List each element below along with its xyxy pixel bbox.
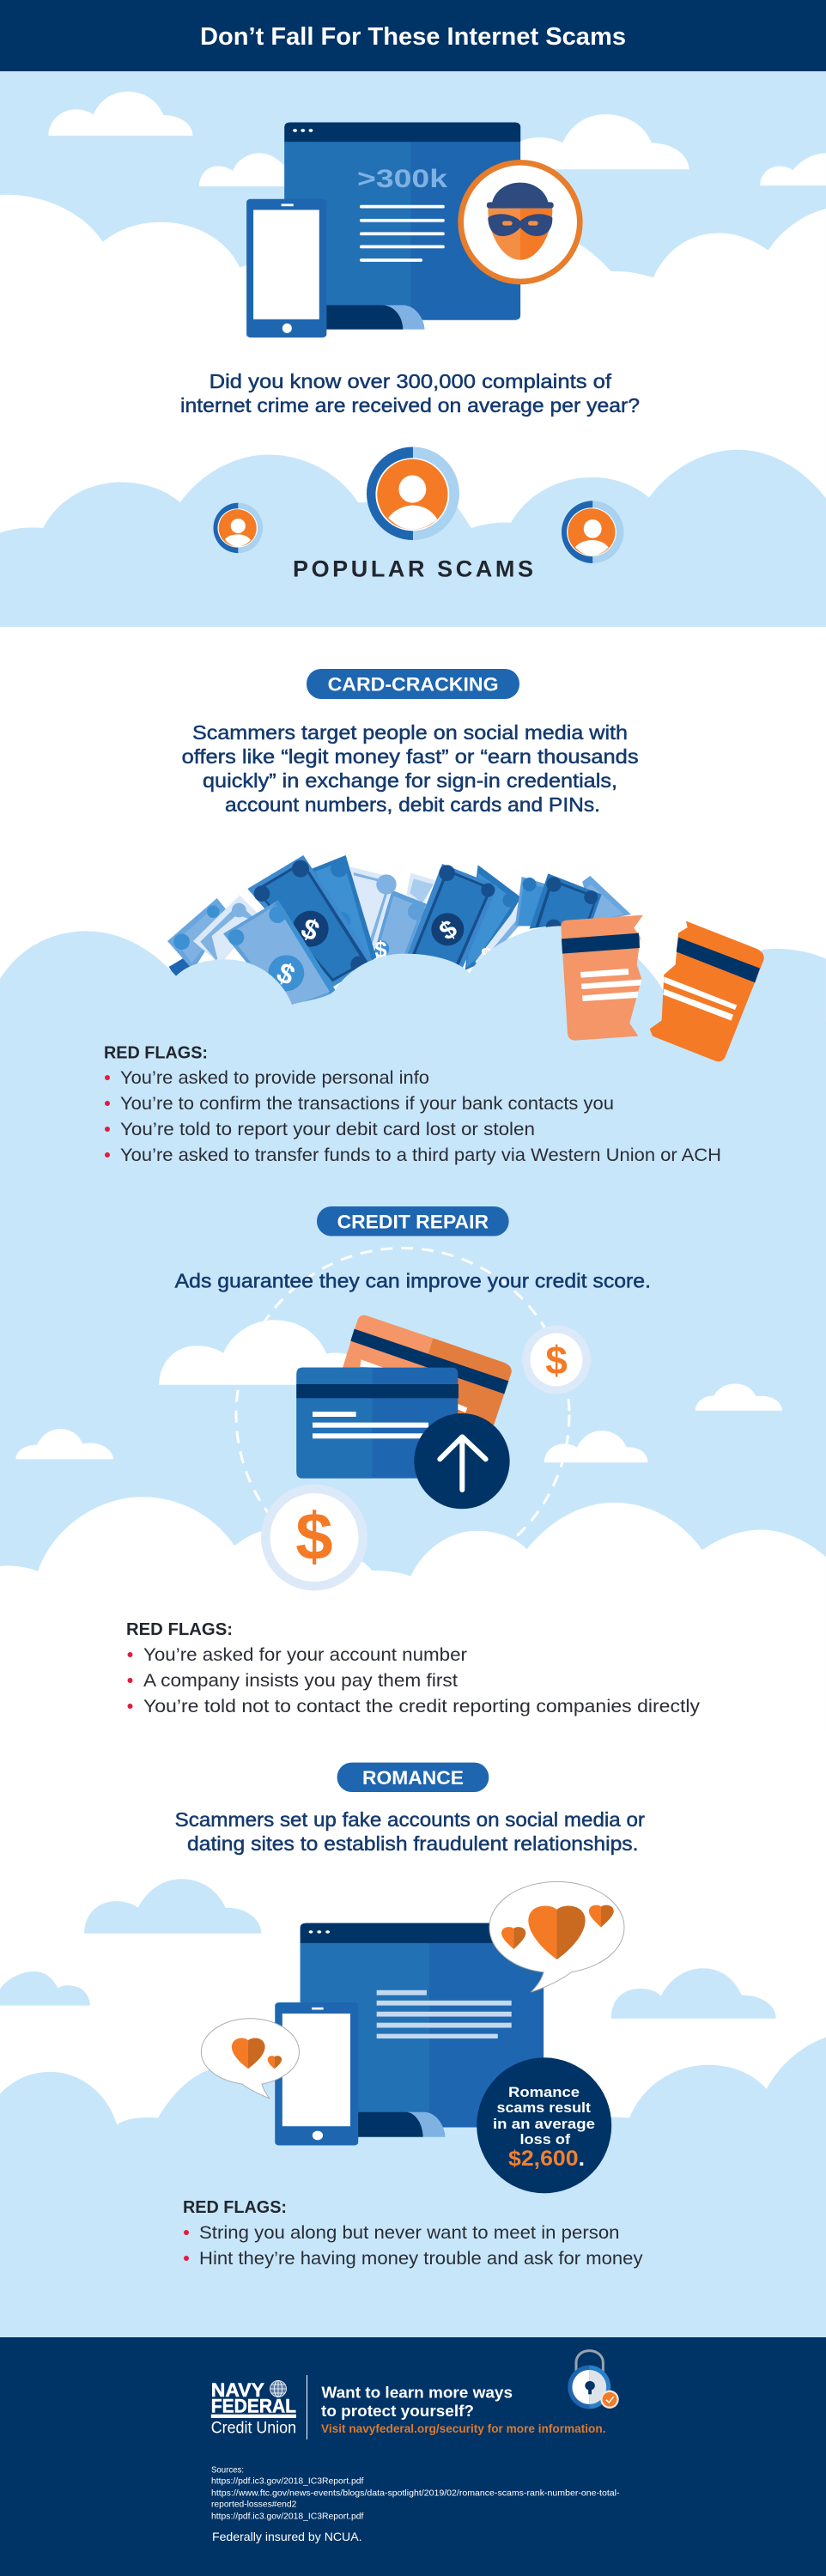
pill: card-cracking (307, 669, 519, 699)
red flags: credit repair: You’re asked for your account number (143, 1645, 467, 1665)
pill: credit repair: CREDIT REPAIR (337, 1211, 489, 1232)
red flags: credit repair: RED FLAGS: (126, 1619, 233, 1639)
description: card-cracking: quickly” in exchange for sign-in credentials, (203, 769, 617, 792)
icon: large coin: $ (295, 1498, 333, 1574)
red flags: romance: RED FLAGS: (183, 2197, 287, 2217)
red flags: card-cracking (104, 1042, 721, 1165)
callout: average loss: $2,600. (508, 2147, 585, 2171)
icon: padlock (568, 2351, 619, 2409)
logo: Navy Federal Credit Union (211, 2379, 296, 2437)
illustration: cash fan: $ (434, 914, 463, 946)
title bar (0, 0, 826, 71)
description: romance (175, 1808, 645, 1855)
panel: card-cracking (0, 627, 826, 1203)
description: card-cracking: Scammers target people on social media with (192, 721, 628, 744)
call to action: Want to learn more ways (321, 2385, 513, 2402)
intro question (180, 370, 640, 416)
illustration: cash fan (167, 855, 631, 1011)
illustration: cash fan: $ (374, 937, 387, 963)
red flags: romance: Hint they’re having money trouble and ask for money (199, 2249, 643, 2269)
pill: card-cracking: CARD-CRACKING (328, 673, 499, 695)
red flags: credit repair: A company insists you pay them first (143, 1671, 458, 1691)
callout: average loss: loss of (520, 2131, 570, 2148)
intro question: internet crime are received on average per year? (180, 394, 640, 416)
cloud: card-cracking (0, 926, 826, 1203)
clouds: romance (0, 1879, 826, 2340)
red flags: credit repair: You’re told not to contact the credit reporting companies directly (143, 1697, 701, 1716)
description: card-cracking (182, 721, 639, 816)
description: credit repair: Ads guarantee they can improve your credit score. (175, 1270, 651, 1292)
callout: average loss: in an average (493, 2116, 595, 2132)
illustration: cash fan: $ (296, 912, 325, 947)
icon: small coin (522, 1326, 591, 1394)
dashed orbit (236, 1249, 569, 1582)
illustration: cash fan: $ (481, 944, 492, 966)
illustration: browser and phone (275, 1923, 544, 2146)
logo: Navy Federal Credit Union: FEDERAL (211, 2395, 296, 2416)
red flags: credit repair (126, 1619, 701, 1716)
speech bubble: large hearts (489, 1881, 624, 1992)
browser stat text: >300k (357, 165, 447, 193)
logo: Navy Federal Credit Union: NAVY (211, 2379, 264, 2401)
sources: Sources: (211, 2464, 244, 2475)
description: romance: dating sites to establish fraudulent relationships. (187, 1832, 639, 1855)
intro question: Did you know over 300,000 complaints of (210, 370, 612, 392)
panel: footer (0, 2337, 826, 2576)
call to action: Visit navyfederal.org/security for more information. (321, 2422, 606, 2435)
speech bubble: small hearts (201, 2019, 299, 2099)
cloud: credit repair (0, 1497, 826, 1735)
description: card-cracking: offers like “legit money fast” or “earn thousands (182, 745, 639, 768)
call to action: to protect yourself? (321, 2403, 474, 2420)
heading: popular scams: POPULAR SCAMS (293, 556, 533, 582)
sources: reported-losses#end2 (211, 2500, 296, 2510)
illustration: credit cards (296, 1315, 512, 1509)
description: romance: Scammers set up fake accounts on social media or (175, 1808, 645, 1831)
red flags: romance (183, 2197, 643, 2269)
illustration: cash fan: $ (272, 956, 300, 991)
sources: https://pdf.ic3.gov/2018_IC3Report.pdf (211, 2476, 363, 2487)
red flags: romance: String you along but never want to meet in person (199, 2223, 620, 2243)
red flags: card-cracking: You’re told to report your debit card lost or stolen (120, 1120, 535, 1139)
call to action (321, 2385, 606, 2435)
callout: average loss: Romance (508, 2084, 580, 2100)
red flags: card-cracking: RED FLAGS: (104, 1042, 208, 1062)
panel: romance (0, 1734, 826, 2340)
logo: Navy Federal Credit Union: Credit Union (211, 2419, 296, 2437)
icon: large coin (261, 1484, 367, 1590)
pill: credit repair (317, 1206, 509, 1236)
disclaimer: Federally insured by NCUA. (212, 2530, 362, 2543)
icon: small coin: $ (545, 1338, 568, 1382)
sources: https://www.ftc.gov/news-events/blogs/data-spotlight/2019/02/romance-scams-rank-number-one-total- (211, 2488, 620, 2499)
red flags: card-cracking: You’re asked to transfer funds to a third party via Western Union or ACH (120, 1145, 721, 1165)
pill: romance: ROMANCE (362, 1767, 464, 1789)
red flags: card-cracking: You’re to confirm the transactions if your bank contacts you (120, 1094, 614, 1114)
callout: average loss (477, 2057, 611, 2193)
sources (211, 2464, 620, 2522)
callout: average loss: scams result (496, 2099, 591, 2116)
sources: https://pdf.ic3.gov/2018_IC3Report.pdf (211, 2512, 363, 2522)
avatars (213, 447, 623, 563)
pill: romance (337, 1763, 489, 1792)
clouds: sky (15, 1320, 782, 1462)
title bar: Don’t Fall For These Internet Scams (200, 23, 626, 51)
panel: credit repair (0, 1206, 826, 1735)
red flags: card-cracking: You’re asked to provide personal info (120, 1068, 429, 1088)
icon: masked scammer (461, 162, 580, 282)
illustration: torn card (561, 915, 764, 1061)
description: card-cracking: account numbers, debit cards and PINs. (225, 793, 600, 816)
